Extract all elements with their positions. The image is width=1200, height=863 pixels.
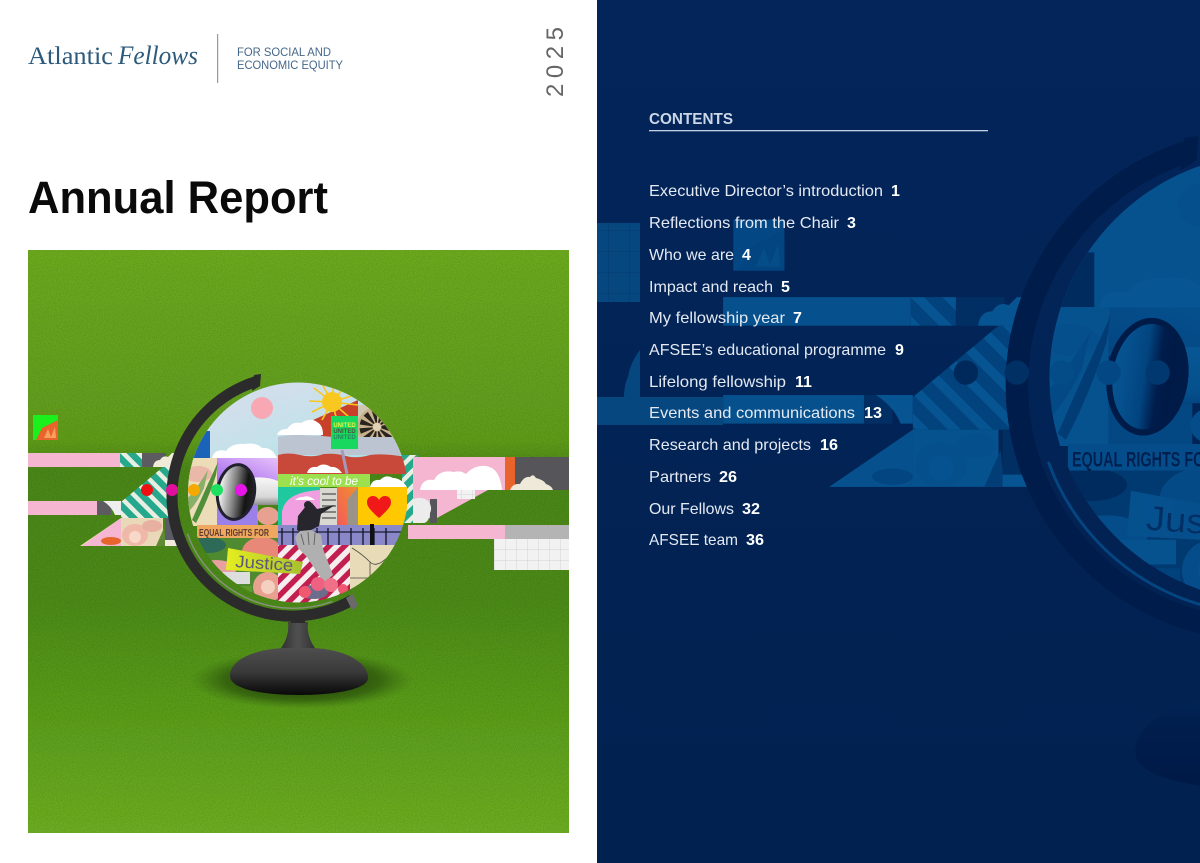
red hill xyxy=(313,400,358,437)
pink flowers xyxy=(299,577,348,599)
row: My fellowship year: 7 xyxy=(793,310,802,327)
row: Research and projects: 16 xyxy=(820,437,838,454)
right collage strips xyxy=(402,455,569,570)
teal arch panel xyxy=(278,487,320,525)
green UNITED poster: UNITED xyxy=(333,435,356,441)
globe artwork xyxy=(182,380,408,608)
sky xyxy=(183,382,407,462)
row: Impact and reach: Impact and reach xyxy=(649,279,773,296)
title: Annual Report xyxy=(28,172,328,223)
green square with flower xyxy=(33,415,58,440)
row: Partners xyxy=(649,469,737,486)
logo: Atlantic Fellows: Fellows xyxy=(117,41,198,70)
row: Reflections from the Chair: Reflections from the Chair xyxy=(649,215,840,232)
row: Reflections from the Chair: 3 xyxy=(847,215,856,232)
Justice label xyxy=(226,548,303,575)
green slogan band: it's cool to be xyxy=(290,474,358,488)
stand neck xyxy=(278,622,318,652)
white cloud over hill xyxy=(277,420,323,435)
row: Executive Director's introduction: Executive Director’s introduction xyxy=(649,183,883,200)
row: AFSEE team: AFSEE team xyxy=(649,532,738,549)
hand and figure xyxy=(295,501,335,583)
panel: contents background xyxy=(597,0,1200,863)
city buildings xyxy=(320,487,358,525)
logo: Atlantic Fellows: FOR SOCIAL AND xyxy=(237,47,331,59)
page background xyxy=(0,0,597,863)
row: AFSEE's educational programme: AFSEE’s educational programme xyxy=(649,342,886,359)
lavender fence band xyxy=(278,524,404,545)
row: Lifelong fellowship: Lifelong fellowship xyxy=(649,374,786,391)
megaphone xyxy=(212,460,278,524)
blue block xyxy=(190,431,210,458)
sun xyxy=(309,385,358,420)
contents heading: CONTENTS xyxy=(649,111,733,128)
year: 2025: 2025 xyxy=(542,27,569,97)
logo: Atlantic Fellows xyxy=(28,34,343,83)
clouds xyxy=(212,444,277,458)
row: My fellowship year: My fellowship year xyxy=(649,310,786,327)
row: Impact and reach: 5 xyxy=(781,279,790,296)
torn red band xyxy=(278,454,407,474)
green slogan band xyxy=(278,474,407,488)
orange slogan band: EQUAL RIGHTS FOR xyxy=(199,527,269,539)
purple panel xyxy=(217,458,278,482)
left floral panel xyxy=(182,458,218,526)
globe base xyxy=(230,648,368,695)
green UNITED poster: UNITED xyxy=(333,423,356,429)
green UNITED poster xyxy=(331,416,358,449)
yellow heart panel xyxy=(358,487,407,525)
crimson striped panel xyxy=(278,545,350,607)
globe base shadow xyxy=(190,651,414,709)
row: Events and communications: 13 xyxy=(864,405,882,422)
logo: Atlantic Fellows: Atlantic xyxy=(28,43,113,70)
row: Research and projects: Research and projects xyxy=(649,437,811,454)
flower bed xyxy=(182,537,283,608)
row: Events and communications: Events and communications xyxy=(649,405,855,422)
row: Who we are: 4 xyxy=(742,247,751,264)
row: Our Fellows: 32 xyxy=(742,501,760,518)
contents list xyxy=(649,183,904,549)
pink petals beside horn xyxy=(257,507,279,525)
globe arm xyxy=(172,374,358,623)
row: Partners: Partners xyxy=(649,469,711,486)
wheel xyxy=(358,405,400,450)
pink sun disc xyxy=(251,397,273,419)
left collage strips xyxy=(28,453,181,546)
panel: ghosted blue globe xyxy=(597,136,1200,791)
row: Who we are: Who we are xyxy=(649,247,734,264)
row: Our Fellows: Our Fellows xyxy=(649,501,734,518)
collage globe illustration xyxy=(28,374,569,695)
row: Executive Director's introduction: 1 xyxy=(891,183,900,200)
coloured dots xyxy=(141,484,247,496)
orange slogan band xyxy=(197,525,278,539)
illustration background: green field xyxy=(28,250,569,833)
logo: Atlantic Fellows: ECONOMIC EQUITY xyxy=(237,60,343,72)
old map xyxy=(350,545,395,590)
Justice label: Justice xyxy=(235,552,294,575)
marble band xyxy=(278,435,408,455)
green UNITED poster: UNITED xyxy=(333,429,356,435)
row: Partners: 26 xyxy=(719,469,737,486)
row: Lifelong fellowship: 11 xyxy=(795,374,812,391)
row: AFSEE's educational programme: 9 xyxy=(895,342,904,359)
row: AFSEE team: 36 xyxy=(746,532,764,549)
